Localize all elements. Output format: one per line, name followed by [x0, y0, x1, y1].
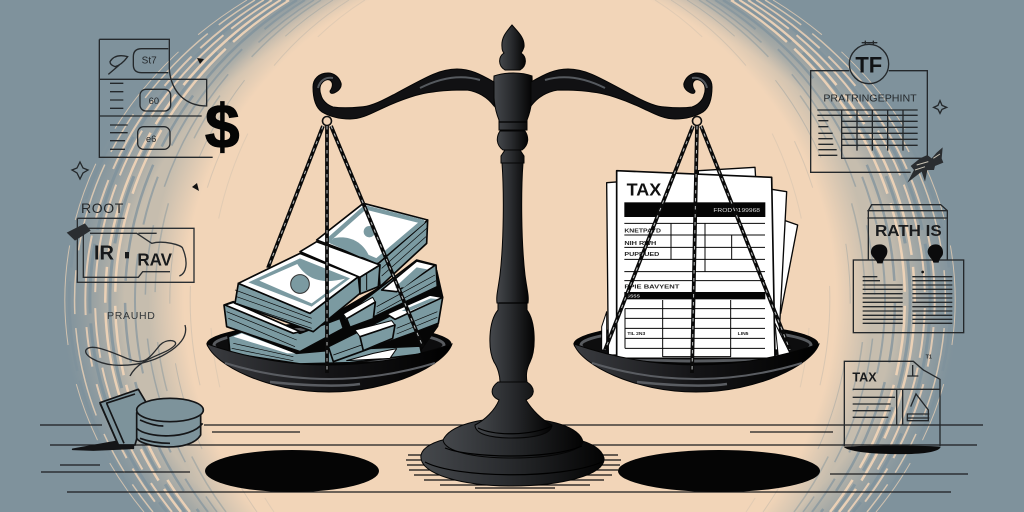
- icon: dollar sign: $: [205, 93, 239, 162]
- panel: TAX house document: T1: [926, 354, 932, 360]
- heading: ROOT: ROOT: [81, 200, 124, 216]
- neck collar and ball: [497, 131, 528, 163]
- stacks: dark backing: [227, 267, 443, 364]
- tax title: TAX: [627, 179, 661, 199]
- scale: base shadow hatching: [406, 455, 621, 488]
- floor lines: [40, 425, 983, 492]
- back pages: [607, 167, 798, 355]
- panel: IR RAV card: IR: [94, 242, 115, 264]
- panel: IR RAV card: [67, 218, 194, 282]
- heading: fraud label: PRAUHD: [107, 310, 156, 322]
- page edges by rim: [602, 312, 790, 357]
- lower form labels: LIN5: [738, 331, 749, 337]
- base bottom tier: [421, 433, 604, 486]
- panel: TF table form: PRATRINGEPHINT: [823, 94, 917, 105]
- left pan rear: [206, 323, 452, 365]
- left money stacks: [224, 203, 443, 364]
- right floor shadow: [618, 450, 820, 492]
- panel: TAX house document: TAX: [852, 371, 877, 385]
- stack: back top: [317, 203, 428, 287]
- header bar code: FROD 0199968: [713, 208, 760, 214]
- form labels: NIH RWH: [624, 241, 657, 247]
- panel: IR RAV card: RAV: [137, 249, 172, 269]
- form labels: PUPRUED: [624, 252, 660, 258]
- panel: form icon top left: [99, 39, 213, 157]
- hub: [494, 73, 532, 130]
- right pan front bowl: [574, 344, 819, 392]
- scale: left beam: [313, 69, 494, 119]
- panel: TF table form: [811, 41, 947, 183]
- left chains: [268, 116, 423, 373]
- stack: lower right: [328, 295, 443, 362]
- main page: [617, 171, 775, 358]
- stack: mid left: [224, 302, 343, 352]
- second black bar: [624, 292, 765, 299]
- icon: books and coins: [73, 389, 203, 450]
- panel: TF table form: TF: [855, 52, 882, 77]
- scale: right beam: [531, 69, 712, 119]
- form labels: [624, 229, 680, 290]
- icon: signature squiggle: [86, 325, 186, 376]
- left pan front bowl: [207, 344, 452, 392]
- finial: [500, 25, 525, 70]
- lower form labels: TIL 2N3: [627, 331, 645, 337]
- panel: form icon top left: St7: [142, 56, 157, 67]
- stack: mid right: [343, 260, 437, 328]
- panel: RATH IS document: [853, 205, 964, 333]
- base top tier with flare: [475, 382, 552, 438]
- scale: beam highlights: [318, 77, 707, 88]
- second bar label: SSSS: [627, 293, 641, 299]
- panel: form icon top left: 60: [149, 96, 159, 106]
- stack: bottom in pan: [228, 332, 422, 364]
- lower form labels: [627, 331, 749, 337]
- stack: paper band: [300, 242, 380, 294]
- right pan rear: [574, 323, 818, 365]
- scale: base and column: [421, 25, 604, 486]
- form labels: KNETPAYD: [624, 229, 661, 235]
- scale: base highlights: [425, 122, 602, 475]
- tax documents stack: [602, 167, 798, 358]
- column shaft: [497, 163, 528, 303]
- black header bar: [624, 202, 765, 217]
- upper form table: [624, 223, 765, 281]
- panel: form icon top left: e6: [146, 134, 156, 144]
- panel: RATH IS document: RATH IS: [875, 223, 942, 240]
- form labels: PPIE BAVYENT: [624, 284, 680, 290]
- base middle tier: [443, 418, 583, 458]
- icon: small dots left: [192, 58, 204, 191]
- panel: TAX house document: [843, 354, 941, 454]
- icon: sparkle left: [72, 162, 88, 179]
- left floor shadow: [205, 450, 379, 492]
- lower form table: [625, 300, 765, 357]
- column vase: [490, 303, 534, 382]
- right chains: [605, 116, 790, 373]
- stack: front top: [235, 253, 360, 332]
